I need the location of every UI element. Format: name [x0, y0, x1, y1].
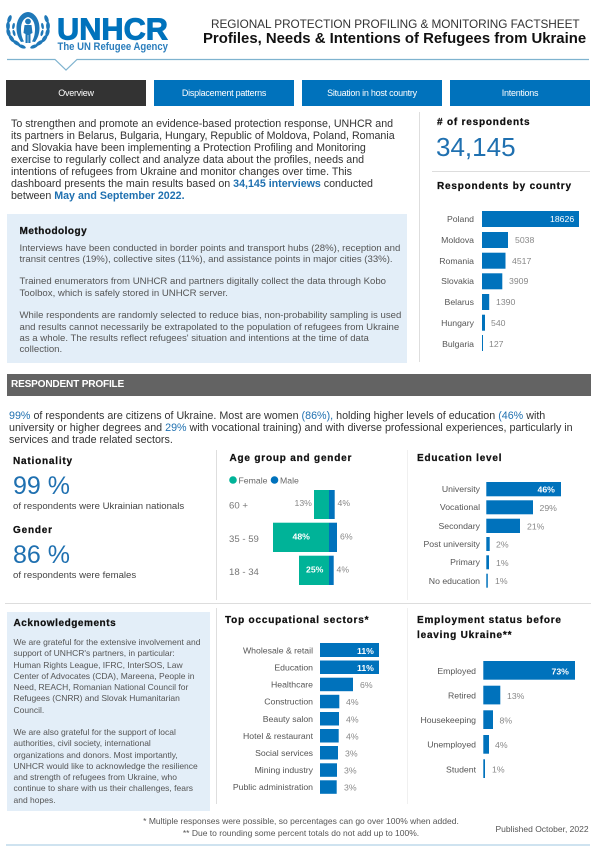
bar: Hungary — [441, 315, 506, 331]
bar: Moldova — [441, 232, 534, 248]
intro text block — [11, 118, 395, 202]
publication date: Published October, 2022 — [496, 824, 589, 834]
legend — [229, 476, 299, 486]
heading: nationality: Nationality — [13, 456, 73, 466]
methodology text: While respondents are randomly selected to reduce bias, non-probability sampling is used — [20, 310, 401, 321]
bar chart: respondents by country — [439, 211, 579, 351]
acknowledgements text: Center of Advocates (CDA), Mareena, People in — [14, 671, 194, 681]
bar: No education: No education — [429, 576, 480, 586]
bar: Hotel & restaurant: Hotel & restaurant — [243, 731, 314, 741]
acknowledgements text: We are grateful for the extensive involvement and — [14, 637, 200, 647]
bar: Post university — [424, 537, 509, 551]
methodology text: Toolbox, which is safely stored in UNHCR server. — [20, 288, 228, 299]
row: 18 - 34: 4% — [336, 564, 349, 574]
heading: age group and gender: Age group and gender — [230, 452, 352, 464]
bar: Wholesale & retail: 11% — [357, 646, 374, 656]
bar: Social services — [255, 746, 358, 760]
bar: Secondary: 21% — [527, 522, 545, 532]
divider: column — [216, 450, 217, 600]
panel: methodology — [7, 214, 407, 363]
acknowledgements text: Human Rights League, IFRC, InterSOS, Law — [14, 660, 183, 670]
bar: Retired: 13% — [507, 691, 525, 701]
bar: Retired: Retired — [448, 690, 476, 700]
acknowledgements text: and hopes. — [14, 794, 56, 804]
methodology text: collection. — [20, 344, 62, 355]
nav tab: Overview — [6, 80, 146, 106]
bar: Construction: Construction — [264, 696, 313, 706]
acknowledgements text: support of UNHCR's partners, in particular: — [14, 648, 175, 658]
bar: Belarus — [445, 294, 515, 310]
bar: Education: 11% — [357, 663, 374, 673]
intro text block: between May and September 2022. — [11, 190, 185, 202]
bar: Construction: 4% — [346, 697, 359, 707]
bar: Public administration — [233, 780, 357, 794]
acknowledgements text: Council. — [14, 704, 44, 714]
bar: Slovakia — [441, 273, 528, 289]
bar chart: employment status — [420, 661, 575, 778]
acknowledgements text: and strength of refugees from Ukraine, who — [14, 772, 177, 782]
logo: UNHCR — [6, 12, 168, 53]
row: 60 +: 60 + — [229, 500, 248, 512]
intro text block: To strengthen and promote an evidence-based protection response, UNHCR and — [11, 118, 393, 130]
footer rule — [6, 844, 590, 846]
heading: number of respondents: # of respondents — [437, 116, 530, 128]
acknowledgements text: continue to share with us their challenges, fears — [14, 783, 193, 793]
bar: Belarus: 1390 — [496, 297, 515, 307]
row: 18 - 34 — [229, 556, 349, 585]
bar: Retired — [448, 686, 525, 704]
bar: Public administration: 3% — [344, 782, 357, 792]
bar: Education — [274, 660, 379, 674]
profile summary text: services and trade related sectors. — [9, 434, 173, 446]
nav tab: Overview: Overview — [58, 88, 94, 98]
bar: Wholesale & retail: Wholesale & retail — [243, 646, 313, 656]
bar: Hungary: Hungary — [441, 318, 475, 328]
footnotes: ** Due to rounding some percent totals do not add up to 100%. — [183, 828, 419, 838]
stat panel: nationality — [13, 456, 184, 512]
chart: age group and gender — [229, 476, 353, 585]
acknowledgements text: Refugees (CNRR) and Slovak Humanitarian — [14, 693, 180, 703]
wordmark: UNHCR: UNHCR — [57, 12, 168, 46]
acknowledgements text: We are also grateful for the support of local — [14, 727, 176, 737]
row: 35 - 59: 35 - 59 — [229, 534, 259, 545]
divider: row — [5, 603, 591, 604]
nav tab: Intentions — [450, 80, 590, 106]
bar: Moldova: Moldova — [441, 235, 474, 245]
intro text block: intentions of refugees from Ukraine and monitor changes over time. This — [11, 166, 352, 178]
bar: Vocational — [440, 500, 557, 514]
bar: Slovakia: 3909 — [509, 276, 528, 286]
nav tab: Situation in host country: Situation in host country — [327, 88, 417, 98]
bar: Secondary — [438, 519, 545, 533]
bar: Education: Education — [274, 662, 313, 672]
section band: respondent profile: RESPONDENT PROFILE — [11, 379, 124, 390]
divider — [432, 171, 590, 172]
bar: Healthcare: Healthcare — [271, 680, 313, 690]
divider: right column — [419, 112, 420, 362]
row: 60 + — [229, 490, 350, 519]
bar chart: education level — [424, 482, 561, 588]
bar: Employed: 73% — [552, 666, 569, 676]
bar: Bulgaria: Bulgaria — [442, 339, 474, 349]
section band: respondent profile — [7, 374, 591, 396]
nav tab: Intentions: Intentions — [502, 88, 538, 98]
bar: University: 46% — [538, 484, 555, 494]
bar: Wholesale & retail — [243, 643, 379, 657]
acknowledgements text: organizations and donors. Most importantly, — [14, 750, 178, 760]
caption: of respondents were females — [13, 570, 136, 581]
acknowledgements text — [14, 637, 200, 804]
bar: Student: Student — [446, 764, 477, 774]
methodology text: Trained enumerators from UNHCR and partners digitally collect the data through Kobo — [20, 276, 386, 287]
title: Profiles, Needs & Intentions of Refugees from Ukraine — [203, 31, 586, 47]
bar: University: University — [442, 484, 481, 494]
bar: Hotel & restaurant — [243, 729, 359, 742]
panel: acknowledgements — [7, 612, 210, 811]
divider: column — [407, 608, 408, 804]
footnotes: * Multiple responses were possible, so percentages can go over 100% when added. — [143, 816, 459, 826]
methodology text: Interviews have been conducted in border points and transport hubs (28%), reception and — [20, 242, 400, 254]
bar: Beauty salon: 4% — [346, 714, 359, 724]
bar: Belarus: Belarus — [445, 297, 475, 307]
methodology text: and results cannot necessarily be extrapolated to the population of refugees from Ukraine — [20, 322, 399, 333]
bar: Poland: 18626 — [550, 214, 574, 224]
bar: Secondary: Secondary — [438, 521, 481, 531]
bar: Hungary: 540 — [491, 318, 506, 328]
bar: Mining industry: Mining industry — [255, 765, 314, 775]
bar: Poland — [447, 211, 579, 227]
row: 60 +: 13% — [294, 498, 312, 508]
bar: Primary — [450, 555, 509, 569]
bar: Slovakia: Slovakia — [441, 276, 474, 286]
legend: Female — [238, 476, 268, 486]
bar: Public administration: Public administration — [233, 782, 313, 792]
bar: Hotel & restaurant: 4% — [346, 732, 359, 742]
bar: Housekeeping: Housekeeping — [420, 715, 476, 725]
bar: Healthcare: 6% — [360, 680, 373, 690]
bar: Moldova: 5038 — [515, 235, 534, 245]
bar: Bulgaria: 127 — [489, 339, 504, 349]
bar: Housekeeping: 8% — [500, 716, 512, 726]
row: 18 - 34: 25% — [306, 564, 324, 574]
stat panel: gender — [13, 524, 136, 581]
profile summary text — [9, 410, 573, 446]
profile summary text: university or higher degrees and 29% with vocational training) and with diverse professional experiences, particularly in — [9, 422, 573, 434]
bar: No education — [429, 574, 508, 588]
intro text block: exercise to regularly collect and analyze data about the profiles, needs and — [11, 154, 364, 166]
bar: Primary: Primary — [450, 557, 481, 567]
bar: Unemployed: 4% — [495, 740, 508, 750]
bar: University — [442, 482, 561, 496]
intro text block: its partners in Belarus, Bulgaria, Hungary, Republic of Moldova, Poland, Romania — [11, 130, 395, 142]
bar: Student — [446, 759, 505, 778]
bar chart: top occupational sectors — [233, 643, 379, 794]
intro text block: and Slovakia have been implementing a Protection Profiling and Monitoring — [11, 142, 366, 154]
methodology text: as a whole. The results reflect refugees' situation and intentions at the time of data — [20, 333, 369, 344]
methodology text — [20, 242, 401, 355]
bar: Construction — [264, 695, 359, 708]
stat: 86 percent: 86 % — [13, 541, 70, 569]
stat: 99 percent: 99 % — [13, 472, 70, 500]
bar: Beauty salon — [263, 712, 359, 726]
profile summary text: 99% of respondents are citizens of Ukraine. Most are women (86%), holding higher levels of education (46% with — [9, 410, 545, 422]
bar: Post university: 2% — [496, 540, 509, 550]
caption: of respondents were Ukrainian nationals — [13, 501, 184, 512]
bar: Beauty salon: Beauty salon — [263, 714, 313, 724]
heading: employment status — [417, 615, 562, 641]
bar: Employed — [437, 661, 575, 680]
legend: Male — [280, 476, 299, 486]
row: 35 - 59: 48% — [292, 532, 310, 542]
bar: Primary: 1% — [496, 558, 509, 568]
header rule with chevron — [7, 58, 589, 71]
footnotes — [143, 816, 459, 838]
bar: Social services: 3% — [345, 748, 358, 758]
acknowledgements text: authorities, civil society, international — [14, 738, 151, 748]
heading: methodology: Methodology — [20, 226, 87, 237]
heading: employment status: Employment status before — [417, 615, 562, 626]
bar: Poland: Poland — [447, 214, 474, 224]
bar: Mining industry — [255, 763, 357, 777]
subtitle: factsheet name: REGIONAL PROTECTION PROFILING & MONITORING FACTSHEET — [211, 17, 580, 31]
bar: Student: 1% — [492, 764, 505, 774]
bar: Social services: Social services — [255, 748, 314, 758]
bar: Romania — [439, 253, 531, 269]
bar: Romania: 4517 — [512, 256, 531, 266]
bar: Employed: Employed — [437, 666, 476, 676]
heading: top occupational sectors: Top occupational sectors* — [225, 614, 369, 626]
bar: Post university: Post university — [424, 539, 481, 549]
bar: Romania: Romania — [439, 256, 474, 266]
nav tab: Displacement patterns — [154, 80, 294, 106]
intro text block: dashboard presents the main results based on 34,145 interviews conducted — [11, 178, 373, 190]
nav tab: Situation in host country — [302, 80, 442, 106]
heading: employment status: leaving Ukraine** — [417, 630, 512, 641]
bar: Vocational: 29% — [540, 503, 557, 513]
heading: acknowledgements: Acknowledgements — [14, 618, 116, 629]
divider: column — [407, 450, 408, 600]
row: 35 - 59 — [229, 523, 353, 552]
methodology text: transit centres (19%), collective sites (11%), and assistance points in major cities (33%). — [20, 254, 393, 265]
bar: Bulgaria — [442, 335, 504, 351]
bar: Mining industry: 3% — [344, 766, 357, 776]
icon: laurel wreath and sheltering hands — [6, 12, 50, 49]
stat: total respondents: 34,145 — [436, 132, 516, 162]
bar: Healthcare — [271, 678, 373, 691]
row: 18 - 34: 18 - 34 — [229, 567, 260, 578]
heading: gender: Gender — [13, 524, 53, 536]
acknowledgements text: UNHCR would like to acknowledge the resilience — [14, 761, 198, 771]
bar: Unemployed — [427, 735, 508, 754]
divider: column — [216, 608, 217, 804]
row: 60 +: 4% — [338, 498, 350, 508]
bar: Vocational: Vocational — [440, 502, 480, 512]
bar: Unemployed: Unemployed — [427, 740, 476, 750]
row: 35 - 59: 6% — [340, 532, 353, 542]
nav tab: Displacement patterns: Displacement patterns — [182, 88, 266, 98]
bar: No education: 1% — [495, 576, 508, 586]
heading: education level: Education level — [417, 452, 502, 464]
acknowledgements text: Need, REACH, Romanian National Council for — [14, 682, 188, 692]
heading: respondents by country: Respondents by country — [437, 180, 572, 192]
bar: Housekeeping — [420, 710, 512, 729]
